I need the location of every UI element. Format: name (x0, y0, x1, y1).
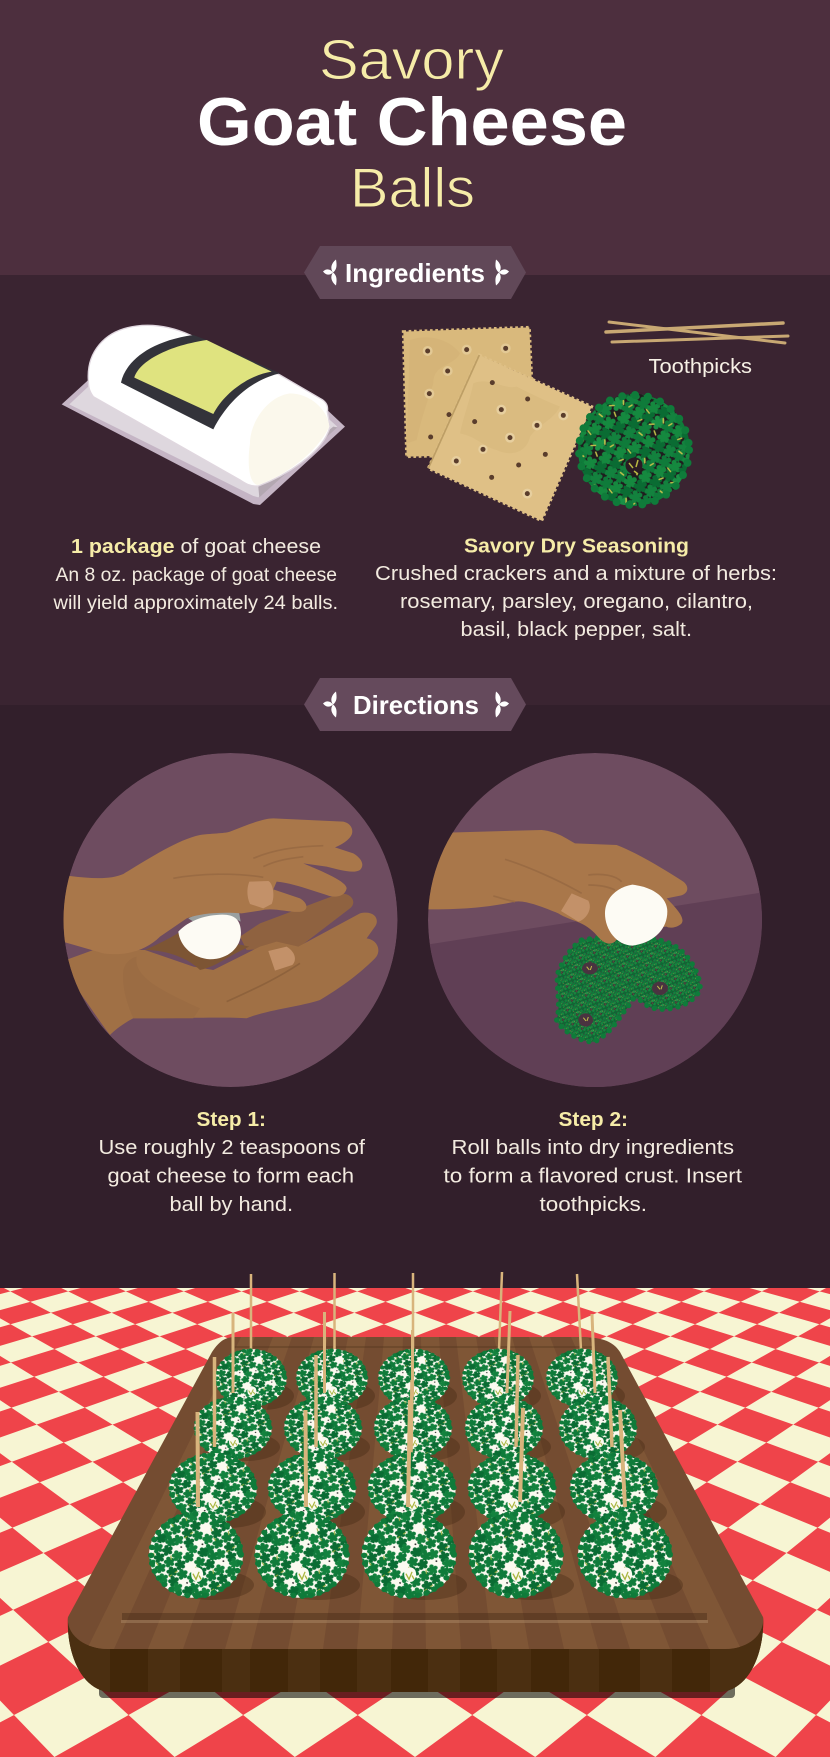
icon: packaged goat cheese (62, 325, 345, 505)
board shadow (99, 1682, 735, 1698)
heading: ingredients badge: Ingredients (345, 258, 485, 288)
text block: goat cheese ingredient: An 8 oz. package of goat cheese (56, 565, 337, 586)
back cracker (403, 327, 532, 457)
heading: ingredients badge (304, 246, 526, 299)
back row of goat cheese balls (215, 1272, 618, 1407)
text block: savory dry seasoning: Crushed crackers and a mixture of herbs: (375, 563, 777, 585)
lower hand (57, 913, 378, 1035)
upper thumb nail (247, 881, 273, 908)
text block: step 2 (444, 1109, 742, 1216)
thumb nail (561, 893, 590, 922)
text block: step 1: ball by hand. (170, 1194, 293, 1216)
front row of goat cheese balls (149, 1400, 672, 1598)
text block: savory dry seasoning (375, 536, 777, 641)
icon: pile of herbs (578, 394, 690, 506)
title: Goat Cheese (197, 84, 627, 160)
text block: step 1: Use roughly 2 teaspoons of (98, 1137, 365, 1159)
panel: step 1 illustration (57, 753, 398, 1087)
herb pile under ball (557, 936, 700, 1042)
upper hand (57, 818, 362, 954)
text block: savory dry seasoning: Savory Dry Seasoning (464, 536, 689, 558)
panel: directions background (0, 705, 830, 1288)
icon: crackers (403, 327, 592, 521)
front cracker (428, 355, 592, 521)
text block: step 2: to form a flavored crust. Insert (444, 1166, 742, 1188)
cheese ball (605, 885, 667, 946)
heading: directions badge (304, 678, 526, 731)
panel: ingredients background (0, 275, 830, 705)
text block: goat cheese ingredient: 1 package of goat cheese (71, 536, 321, 558)
ball shadows (170, 1382, 683, 1600)
title (197, 28, 627, 219)
board side (68, 1617, 764, 1692)
lower hand finger (240, 893, 353, 950)
text block: savory dry seasoning: basil, black pepper, salt. (460, 619, 692, 641)
text block: step 1 (98, 1109, 365, 1216)
panel: checkered tablecloth (0, 1288, 830, 1757)
text block: goat cheese ingredient (52, 536, 338, 614)
third row of goat cheese balls (169, 1355, 658, 1523)
cheese ball (178, 912, 241, 959)
panel: step 2 illustration (422, 753, 765, 1090)
second row of goat cheese balls (194, 1311, 637, 1459)
text block: step 2: Step 2: (558, 1109, 628, 1131)
heading: directions badge: Directions (353, 690, 479, 720)
text block: step 2: Roll balls into dry ingredients (452, 1137, 734, 1159)
panel: wooden cutting board (60, 1272, 770, 1700)
text block: goat cheese ingredient: will yield approximately 24 balls. (52, 593, 338, 614)
label: toothpicks: Toothpicks (648, 356, 752, 378)
lower thumb nail (268, 947, 295, 971)
text block: step 1: goat cheese to form each (108, 1166, 354, 1188)
board top (60, 1330, 770, 1655)
text block: step 1: Step 1: (196, 1109, 266, 1131)
title: Savory (319, 28, 505, 92)
panel: title header background (0, 0, 830, 275)
hand (422, 830, 687, 944)
text block: step 2: toothpicks. (540, 1194, 647, 1216)
label on cheese (121, 335, 280, 429)
icon: toothpicks (606, 322, 788, 343)
text block: savory dry seasoning: rosemary, parsley, oregano, cilantro, (400, 591, 753, 613)
palm hollow (145, 932, 249, 970)
title: Balls (350, 156, 475, 219)
